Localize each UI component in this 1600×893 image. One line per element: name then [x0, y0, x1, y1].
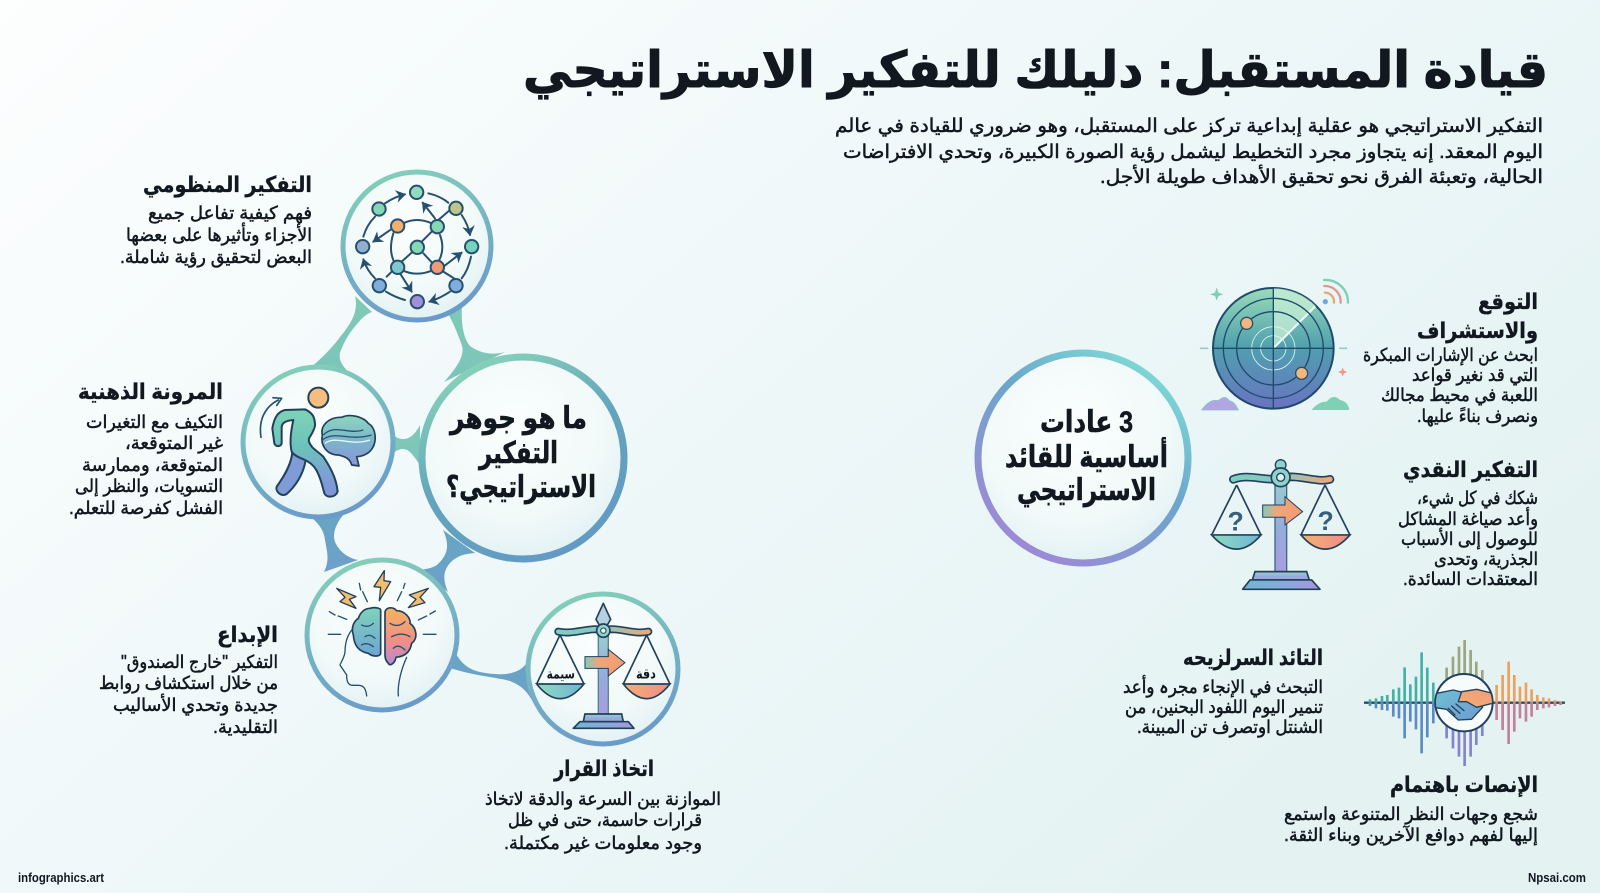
- text block: critical thinking: وأعد صياغة المشاكل: [1398, 507, 1538, 530]
- text block: systems thinking: التفكير المنظومي: [143, 172, 312, 198]
- hub question text: الاستراتيجي؟: [446, 471, 596, 505]
- node: creativity: [307, 560, 457, 710]
- text block: critical thinking: الجذرية، وتحدى: [1434, 549, 1538, 570]
- text block: critical thinking: للوصول إلى الأسباب: [1401, 528, 1538, 550]
- habits heading text: الاستراتيجي: [1017, 474, 1156, 508]
- text block: systems thinking: الأجزاء وتأثيرها على بعضها: [126, 222, 312, 246]
- habits heading text: 3 عادات: [1040, 406, 1133, 439]
- connector: hub to creativity: [418, 530, 475, 592]
- text block: decision making: اتخاذ القرار: [553, 756, 654, 782]
- text block: third habit (garbled heading): الشنتل اوتصرف تن المبينة.: [1137, 717, 1323, 738]
- title: قيادة المستقبل: دليلك للتفكير الاستراتيجي: [523, 42, 1548, 100]
- text block: foresight: التوقع: [1478, 289, 1538, 315]
- text block: decision making: وجود معلومات غير مكتملة.: [504, 833, 702, 854]
- text block: foresight: ابحث عن الإشارات المبكرة: [1363, 345, 1538, 366]
- habits circle: [978, 353, 1188, 563]
- footer credit right: Npsai.com: [1528, 871, 1586, 885]
- text block: creativity: [99, 622, 278, 737]
- intro paragraph: التفكير الاستراتيجي هو عقلية إبداعية تركز على المستقبل، وهو ضروري للقيادة في عالم: [835, 116, 1543, 138]
- connector: flexibility to hub: [385, 425, 420, 465]
- text block: systems thinking: [120, 172, 312, 268]
- node: mental flexibility: [243, 367, 393, 517]
- text block: third habit (garbled heading): [1123, 645, 1323, 738]
- text block: systems thinking: البعض لتحقيق رؤية شاملة.: [120, 247, 312, 268]
- text block: mental flexibility: [69, 379, 223, 519]
- icon: head with two-colored brain and lightning: [328, 571, 436, 696]
- text block: decision making: [485, 756, 721, 854]
- intro paragraph: [835, 116, 1543, 188]
- text block: mental flexibility: المتوقعة، وممارسة: [82, 455, 223, 476]
- text block: creativity: جديدة وتحدي الأساليب: [113, 694, 278, 716]
- text block: critical thinking: المعتقدات السائدة.: [1403, 569, 1538, 589]
- text block: third habit (garbled heading): التائد السرلزيحه: [1183, 645, 1323, 671]
- footer credit left: infographics.art: [18, 871, 105, 885]
- text block: active listening: إليها لفهم دوافع الآخرين وبناء الثقة.: [1284, 824, 1538, 846]
- icon: balance scale speed versus accuracy: [537, 603, 670, 728]
- habits heading text: أساسية للقائد: [1005, 437, 1168, 474]
- node: decision making: [528, 594, 678, 744]
- node: systems thinking: [343, 172, 491, 320]
- panel: strategic thinking essence cluster: [69, 172, 721, 854]
- text block: systems thinking: فهم كيفية تفاعل جميع: [148, 203, 312, 224]
- text block: decision making: قرارات حاسمة، حتى في ظل: [508, 810, 702, 831]
- connector: network to hub: [444, 306, 505, 382]
- icon: balance scale speed versus accuracy: دقة: [636, 665, 656, 681]
- panel: three habits of the strategic leader: [978, 280, 1565, 846]
- hub question text: ما هو جوهر: [448, 402, 587, 435]
- text block: foresight: والاستشراف: [1417, 318, 1538, 344]
- text block: active listening: [1284, 772, 1538, 846]
- text block: mental flexibility: المرونة الذهنية: [78, 379, 223, 405]
- text block: creativity: الإبداع: [217, 622, 278, 647]
- connector: flexibility to creativity: [308, 514, 358, 572]
- text block: mental flexibility: غير المتوقعة،: [125, 433, 223, 454]
- connector: network to flexibility: [310, 296, 372, 376]
- icon: network of nodes: [356, 186, 478, 308]
- text block: creativity: التفكير "خارج الصندوق": [121, 652, 278, 673]
- text block: third habit (garbled heading): تنمير اليوم اللفود البحنين، من: [1125, 697, 1323, 718]
- text block: active listening: شجع وجهات النظر المتنوعة واستمع: [1284, 804, 1538, 825]
- icon: radar: [1200, 280, 1349, 410]
- text block: mental flexibility: التكيف مع التغيرات: [86, 412, 223, 433]
- icon: balance scale with question marks: ?: [1318, 506, 1334, 536]
- text block: active listening: الإنصات باهتمام: [1390, 772, 1538, 797]
- text block: creativity: من خلال استكشاف روابط: [99, 673, 278, 694]
- intro paragraph: اليوم المعقد. إنه يتجاوز مجرد التخطيط ليشمل رؤية الصورة الكبيرة، وتحدي الافتراضات: [843, 142, 1543, 164]
- text block: decision making: الموازنة بين السرعة والدقة لاتخاذ: [485, 789, 721, 810]
- text block: foresight: ونصرف بناءً عليها.: [1417, 406, 1538, 427]
- icon: balance scale speed versus accuracy: سيمة: [547, 665, 575, 681]
- habits heading text: [1005, 406, 1168, 508]
- icon: balance scale with question marks: ?: [1228, 507, 1244, 537]
- text block: creativity: التقليدية.: [213, 717, 278, 737]
- hub question text: [446, 402, 596, 505]
- text block: foresight: اللعبة في محيط مجالك: [1381, 385, 1538, 406]
- icon: balance scale with question marks: [1212, 460, 1350, 589]
- hub question text: التفكير: [477, 437, 558, 470]
- icon: sound wave with handshake: [1364, 640, 1565, 766]
- icon: walking figure with brain: [260, 388, 375, 497]
- text block: mental flexibility: الفشل كفرصة للتعلم.: [69, 498, 223, 519]
- connector: creativity to decision: [450, 650, 534, 704]
- text block: critical thinking: شكك في كل شيء،: [1417, 488, 1538, 509]
- text block: mental flexibility: التسويات، والنظر إلى: [75, 476, 223, 497]
- text block: foresight: [1363, 289, 1538, 427]
- hub circle: [422, 357, 624, 559]
- intro paragraph: الحالية، وتعبئة الفرق نحو تحقيق الأهداف طويلة الأجل.: [1100, 165, 1543, 188]
- text block: critical thinking: [1398, 457, 1538, 589]
- text block: critical thinking: التفكير النقدي: [1403, 457, 1538, 483]
- text block: foresight: التي قد نغير قواعد: [1412, 365, 1538, 386]
- text block: third habit (garbled heading): التبحث في الإنجاء مجرہ وأعد: [1123, 675, 1323, 698]
